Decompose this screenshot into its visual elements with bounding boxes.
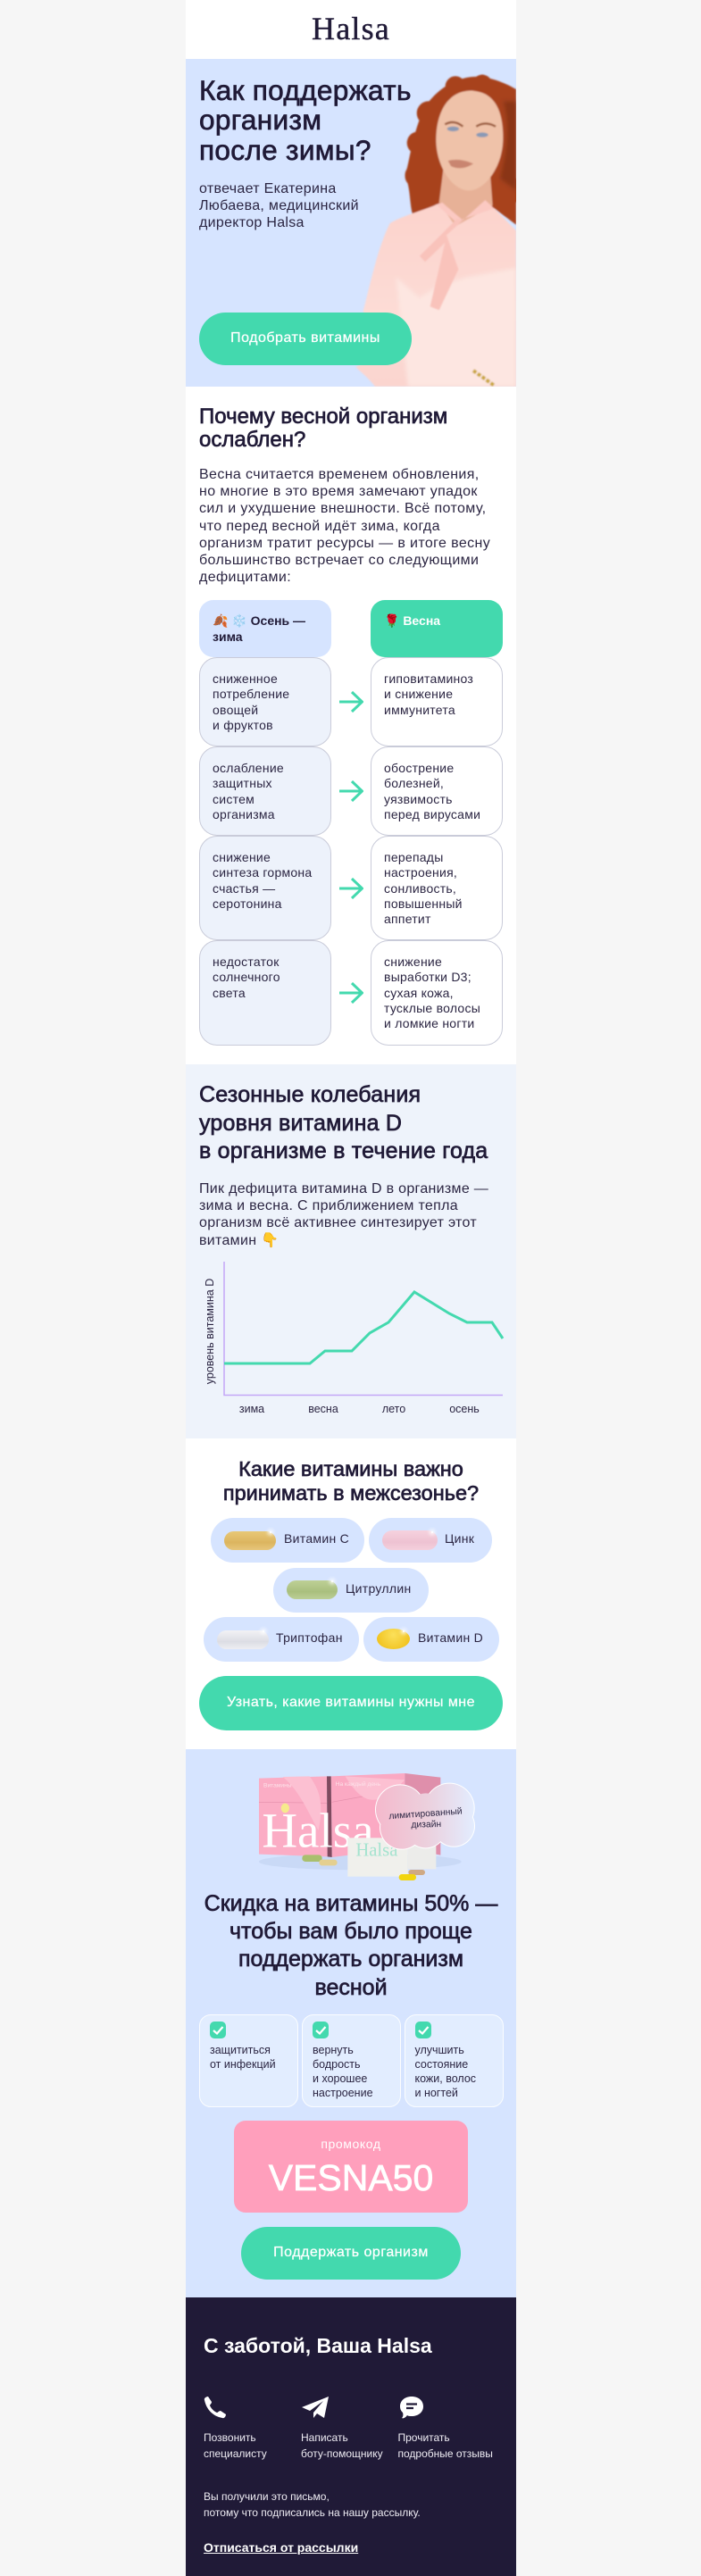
- icon: chat bubble: [400, 2397, 423, 2418]
- card: skin hair nails: [404, 2014, 504, 2107]
- card: energy and mood: настроение: [313, 2086, 373, 2098]
- promo code block: VESNA50: [269, 2157, 433, 2198]
- cell: weakened defenses: ослабление: [213, 761, 284, 775]
- hero subtitle: директор Halsa: [199, 215, 305, 230]
- footer note: [204, 2490, 421, 2519]
- button: support body: Поддержать организм: [273, 2245, 429, 2260]
- card: skin hair nails: кожи, волос: [414, 2072, 476, 2084]
- footer note: Вы получили это письмо,: [204, 2490, 330, 2503]
- table header: spring: 🌹 Весна: [384, 613, 440, 628]
- text block: intro: [199, 467, 490, 585]
- cell: D3 production: выработки D3;: [384, 970, 472, 984]
- illustration: vitamin box: лимитированный: [388, 1806, 463, 1822]
- cell: weakened defenses: систем: [213, 792, 255, 806]
- text block: intro: Весна считается временем обновления,: [199, 467, 480, 482]
- card: energy and mood: [302, 2014, 401, 2107]
- pill: citrulline: [273, 1568, 429, 1613]
- card: skin hair nails: улучшить: [414, 2043, 464, 2055]
- footer link: reviews: [398, 2431, 493, 2460]
- promo code block: [234, 2121, 468, 2213]
- text block: intro: но многие в это время замечают упадок: [199, 484, 478, 499]
- cell: mood swings: [371, 836, 503, 940]
- arrow 3: [339, 878, 363, 899]
- cell: weakened defenses: [199, 746, 331, 836]
- cell: weakened defenses: организма: [213, 807, 275, 821]
- icon: check: [414, 2022, 430, 2038]
- table header: autumn-winter: зима: [213, 629, 243, 644]
- panel: discount section: [186, 1749, 516, 2297]
- heading: why weak in spring: [199, 404, 447, 452]
- unsubscribe link: Отписаться от рассылки: [204, 2540, 358, 2555]
- heading: seasonal fluctuations: в организме в течение года: [199, 1138, 488, 1163]
- arrow 4: [339, 982, 363, 1004]
- cell: mood swings: сонливость,: [384, 881, 456, 896]
- illustration: vitamin box: На каждый день: [336, 1780, 381, 1788]
- hero title: после зимы?: [199, 134, 371, 166]
- line chart: vitamin D level: осень: [449, 1403, 480, 1415]
- cell: exacerbation: перед вирусами: [384, 807, 480, 821]
- heading: seasonal fluctuations: Сезонные колебания: [199, 1082, 421, 1107]
- cell: exacerbation: [371, 746, 503, 836]
- heading: why weak in spring: Почему весной организм: [199, 404, 447, 429]
- text block: intro: дефицитами:: [199, 570, 291, 585]
- hero title: организм: [199, 104, 321, 136]
- cell: serotonin: синтеза гормона: [213, 865, 312, 880]
- icon: check: [313, 2022, 329, 2038]
- cell: lack of sunlight: света: [213, 986, 246, 1000]
- footer link: reviews: подробные отзывы: [398, 2447, 493, 2460]
- button: support body: [241, 2227, 461, 2280]
- heading: which vitamins: [223, 1457, 479, 1505]
- cell: mood swings: настроения,: [384, 865, 457, 880]
- pill: zinc: [369, 1518, 492, 1563]
- text block: intro: что перед весной идёт зима, когда: [199, 519, 440, 534]
- icon: phone: [204, 2397, 226, 2418]
- panel: vitamin D chart section: [186, 1064, 516, 1438]
- footer link: bot: [301, 2431, 383, 2460]
- cell: mood swings: аппетит: [384, 912, 431, 926]
- card: protect from infections: защититься: [210, 2043, 271, 2055]
- text block: vitamin D deficit: Пик дефицита витамина D в организме —: [199, 1181, 488, 1196]
- table header: spring: [371, 600, 503, 657]
- illustration: vitamin box: Halsa: [262, 1803, 374, 1857]
- illustration: vitamin box: Витамины: [263, 1783, 292, 1789]
- heading: which vitamins: Какие витамины важно: [238, 1457, 463, 1480]
- illustration: vitamin box: дизайн: [411, 1820, 441, 1830]
- heading: discount: чтобы вам было проще: [229, 1919, 472, 1944]
- pill: vitamin C: Витамин С: [284, 1531, 349, 1546]
- capsule: yellow: [224, 1531, 276, 1550]
- footer heading: С заботой, Ваша Halsa: [204, 2334, 432, 2357]
- logo: Halsa: [312, 11, 390, 46]
- line chart: vitamin D level: лето: [382, 1403, 405, 1415]
- cell: hypovitaminosis: иммунитета: [384, 703, 455, 717]
- cell: lack of sunlight: [199, 940, 331, 1046]
- table header: autumn-winter: 🍂 ❄️ Осень —: [213, 613, 305, 628]
- cell: hypovitaminosis: и снижение: [384, 687, 453, 701]
- card: protect from infections: [199, 2014, 298, 2107]
- capsule: green: [287, 1580, 338, 1599]
- cell: reduced intake: потребление: [213, 687, 289, 701]
- footer link: bot: боту-помощнику: [301, 2447, 383, 2460]
- button: find out vitamins: Узнать, какие витамины нужны мне: [227, 1695, 475, 1710]
- capsule: softgel: [377, 1629, 410, 1649]
- cell: hypovitaminosis: гиповитаминоз: [384, 671, 473, 686]
- cell: exacerbation: уязвимость: [384, 792, 453, 806]
- arrow 2: [339, 780, 363, 802]
- illustration: portrait of medical director: [355, 73, 516, 387]
- pill: vitamin D: Витамин D: [418, 1630, 483, 1645]
- illustration: vitamin box: Halsa: [355, 1840, 397, 1860]
- text block: intro: организм тратит ресурсы — в итоге весну: [199, 536, 490, 551]
- cell: serotonin: серотонина: [213, 896, 282, 911]
- heading: discount: Скидка на витамины 50% —: [204, 1891, 497, 1916]
- line chart: vitamin D level: уровень витамина D: [204, 1279, 216, 1384]
- cell: D3 production: сухая кожа,: [384, 986, 454, 1000]
- heading: seasonal fluctuations: [198, 1082, 488, 1163]
- footer link: call: [204, 2431, 267, 2460]
- card: energy and mood: и хорошее: [313, 2072, 367, 2084]
- cell: D3 production: снижение: [384, 955, 442, 969]
- card: energy and mood: вернуть: [313, 2043, 354, 2055]
- heading: discount: поддержать организм: [238, 1947, 463, 1972]
- footer link: reviews: Прочитать: [398, 2431, 450, 2444]
- table header: autumn-winter: [199, 600, 331, 657]
- pill: vitamin D: [363, 1617, 499, 1662]
- hero title: [199, 74, 500, 2243]
- text block: vitamin D deficit: [199, 1181, 488, 1248]
- panel: hero: [186, 59, 516, 387]
- footer link: call: специалисту: [204, 2447, 267, 2460]
- text block: vitamin D deficit: организм всё активнее синтезирует этот: [199, 1215, 477, 1230]
- cell: reduced intake: и фруктов: [213, 718, 273, 732]
- cell: serotonin: снижение: [213, 850, 271, 864]
- cell: exacerbation: болезней,: [384, 776, 444, 790]
- capsule: white: [217, 1630, 269, 1649]
- heading: seasonal fluctuations: уровня витамина D: [199, 1111, 402, 1136]
- cell: D3 production: тусклые волосы: [384, 1001, 480, 1015]
- heading: why weak in spring: ослаблен?: [199, 428, 305, 452]
- capsule: pink: [382, 1530, 438, 1550]
- cell: serotonin: счастья —: [213, 881, 275, 896]
- cell: weakened defenses: защитных: [213, 776, 272, 790]
- text block: intro: большинство встречает со следующими: [199, 553, 479, 568]
- heading: discount: весной: [314, 1975, 388, 2000]
- footer note: потому что подписались на нашу рассылку.: [204, 2506, 421, 2519]
- button: pick vitamins: [199, 313, 412, 365]
- cell: hypovitaminosis: [371, 657, 503, 746]
- cell: reduced intake: [199, 657, 331, 746]
- text block: intro: сил и ухудшение внешности. Всё потому,: [199, 501, 486, 516]
- panel: footer: [186, 2297, 516, 2576]
- card: energy and mood: бодрость: [313, 2057, 361, 2070]
- line chart: vitamin D level: весна: [308, 1403, 338, 1415]
- hero subtitle: Любаева, медицинский: [199, 198, 359, 213]
- line chart: vitamin D level: [204, 1262, 504, 1415]
- promo code block: промокод: [321, 2137, 381, 2151]
- button: pick vitamins: Подобрать витамины: [230, 330, 380, 346]
- icon: check: [210, 2022, 226, 2038]
- hero subtitle: [199, 181, 503, 2272]
- panel: email column: [186, 0, 516, 2576]
- hero title: Как поддержать: [199, 74, 412, 106]
- card: skin hair nails: состояние: [414, 2057, 468, 2070]
- cell: D3 production: и ломкие ногти: [384, 1016, 474, 1030]
- heading: which vitamins: принимать в межсезонье?: [223, 1481, 479, 1505]
- text block: vitamin D deficit: зима и весна. С приближением тепла: [199, 1198, 458, 1213]
- pill: zinc: Цинк: [445, 1531, 474, 1546]
- cell: lack of sunlight: солнечного: [213, 970, 280, 984]
- cell: mood swings: перепады: [384, 850, 444, 864]
- footer link: call: Позвонить: [204, 2431, 256, 2444]
- heading: discount: [204, 1891, 498, 2000]
- illustration: vitamin box: [259, 1773, 475, 1880]
- pill: tryptophan: [204, 1617, 359, 1662]
- cell: reduced intake: овощей: [213, 703, 258, 717]
- card: protect from infections: от инфекций: [210, 2057, 276, 2070]
- pill: tryptophan: Триптофан: [276, 1630, 343, 1645]
- pill: vitamin C: [211, 1518, 364, 1563]
- footer link: bot: Написать: [301, 2431, 348, 2444]
- icon: paper plane: [302, 2397, 329, 2418]
- hero subtitle: отвечает Екатерина: [199, 181, 337, 196]
- button: find out vitamins: [199, 1676, 503, 1730]
- cell: D3 production: [371, 940, 503, 1046]
- text block: vitamin D deficit: витамин 👇: [199, 1233, 279, 1248]
- arrow 1: [339, 691, 363, 713]
- cell: reduced intake: сниженное: [213, 671, 278, 686]
- cell: serotonin: [199, 836, 331, 940]
- line chart: vitamin D level: зима: [239, 1403, 264, 1415]
- cell: exacerbation: обострение: [384, 761, 454, 775]
- cell: mood swings: повышенный: [384, 896, 463, 911]
- cell: lack of sunlight: недостаток: [213, 955, 280, 969]
- pill: citrulline: Цитруллин: [346, 1581, 411, 1596]
- card: skin hair nails: и ногтей: [414, 2086, 458, 2098]
